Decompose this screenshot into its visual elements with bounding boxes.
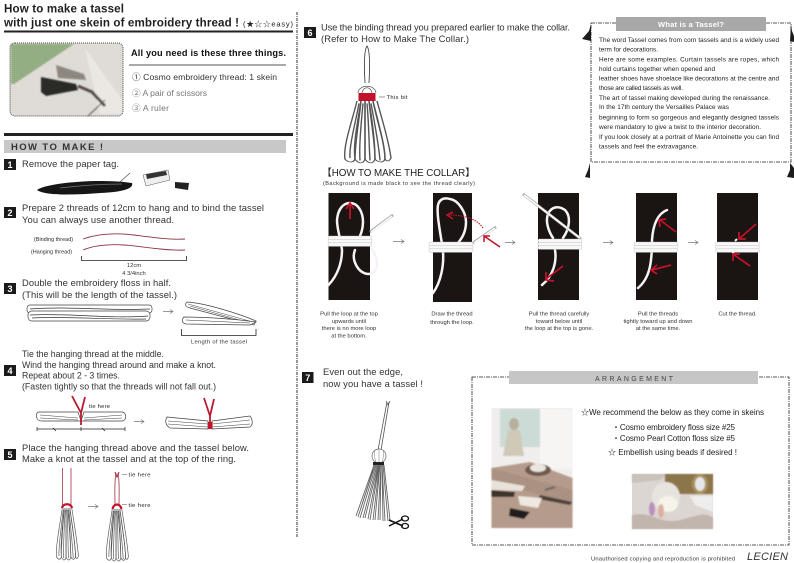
collar step 2: Draw the thread (431, 312, 473, 318)
collar step 3: toward below until (536, 319, 582, 325)
collar step 1: upwards until (332, 319, 366, 325)
diagram: 12cm threads: (Hanging thread) (31, 250, 72, 256)
materials list: All you need is these three things. (131, 48, 286, 58)
diagram: folded floss (27, 302, 256, 346)
collar step 3: the loop at the top is gone. (525, 326, 594, 332)
diagram: tassel with red collar (345, 46, 408, 163)
panel: what is a tassel: What is a Tassel? (658, 20, 724, 29)
step 5: 5 (7, 450, 13, 460)
collar step 2: through the loop. (430, 320, 474, 326)
title: How to make a tassel (4, 2, 124, 16)
diagram: 12cm threads: (Binding thread) (34, 237, 73, 243)
diagram: 12cm threads: 12cm (127, 263, 141, 269)
icon: skein with paper tag (37, 170, 189, 195)
text block: tassel description: If you look closely at a portrait of Marie Antoinette you can find (599, 134, 779, 141)
step 6: 6 (307, 28, 313, 38)
step 4: Repeat about 2 - 3 times. (22, 370, 120, 380)
footer: copyright note: Unauthorised copying and reproduction is prohibited (591, 556, 735, 562)
panel: what is a tassel (582, 17, 794, 178)
diagram: tie at the middle: tie here (89, 404, 110, 410)
step 7: now you have a tassel ! (323, 378, 423, 389)
collar step 4 (624, 193, 692, 332)
step 2: Prepare 2 threads of 12cm to hang and to bind the tassel (22, 202, 264, 213)
text block: tassel description: The word Tassel comes from corn tassels and is a widely used (599, 37, 779, 44)
step 7: Even out the edge, (323, 366, 403, 377)
materials list (129, 48, 286, 113)
materials list: ② A pair of scissors (132, 88, 207, 98)
diagram: tassel with red collar: This bit (386, 95, 408, 101)
text block: recommendations: ・Cosmo embroidery floss size #25 (612, 423, 736, 432)
collar step 5 (716, 193, 760, 318)
step 6: Use the binding thread you prepared earlier to make the collar. (321, 22, 570, 32)
step 2: 2 (7, 208, 13, 218)
text block: tassel description: were mandatory to give a twist to the interior decoration. (598, 124, 761, 131)
materials list: ① Cosmo embroidery thread: 1 skein (132, 72, 277, 82)
step 3: (This will be the length of the tassel.) (22, 289, 177, 300)
text block: tassel description: leather shoes have shoelace like decorations at the centre and (599, 76, 779, 82)
diagram: tie at the middle (36, 396, 252, 431)
text block: tassel description: hold curtains together when opened and (599, 66, 715, 73)
title: with just one skein of embroidery thread ! (3, 16, 239, 30)
text block: recommendations: ・Cosmo Pearl Cotton floss size #5 (612, 434, 736, 443)
heading: how to make: HOW TO MAKE ! (11, 142, 103, 153)
step 6 (304, 22, 570, 163)
diagram: first tassel (56, 468, 78, 560)
collar step 4: at the same time. (636, 326, 681, 332)
text block: tassel description: Here are some examples. Curtain tassels are ropes, which (599, 56, 779, 64)
step 5 (4, 442, 249, 561)
step 5: Make a knot at the tassel and at the top of the ring. (22, 453, 236, 464)
panel: arrangement: ARRANGEMENT (595, 376, 674, 383)
collar step 3 (523, 193, 594, 332)
collar step 5: Cut the thread. (718, 312, 757, 318)
logo: LECIEN: LECIEN (747, 551, 788, 563)
title (3, 2, 294, 30)
text block: recommendations: ☆ Embellish using beads if desired ! (608, 448, 737, 457)
collar step 3: Pull the thread carefully (529, 312, 589, 318)
diagram: second tassel with tie points (106, 472, 150, 561)
collar step 1: Pull the loop at the top (320, 312, 378, 318)
step 4: 4 (7, 366, 13, 376)
step 1: Remove the paper tag. (22, 158, 119, 169)
text block: tassel description: those are called tassels as well. (599, 85, 683, 92)
collar step 4: tightly toward up and down (624, 319, 692, 325)
step 7: 7 (305, 373, 310, 383)
text block: tassel description: tassels and feel the extravagance. (599, 144, 698, 150)
step 1 (4, 158, 189, 195)
text block: recommendations (581, 408, 764, 457)
collar step 1: there is no more loop (322, 326, 376, 332)
text block: tassel description: beginning to form so gorgeous and elegantly designed tassels (599, 114, 779, 122)
diagram: folded floss: Length of the tassel (191, 340, 247, 346)
step 5: Place the hanging thread above and the tassel below. (22, 442, 249, 453)
step 4: Tie the hanging thread at the middle. (22, 349, 164, 359)
heading: how to make the collar: 【HOW TO MAKE THE COLLAR】 (322, 167, 475, 179)
collar step 4: Pull the threads (638, 312, 678, 318)
heading: how to make the collar (322, 167, 475, 187)
photo: bead tassels in glass (632, 474, 713, 529)
step 4: (Fasten tightly so that the threads will not fall out.) (22, 382, 216, 392)
text block: tassel description: In the 17th century the Versailles Palace was (599, 104, 729, 111)
icon: scissors (389, 516, 408, 528)
photo: curtain tassel and scissors (492, 408, 572, 528)
step 4 (4, 349, 252, 431)
text block: tassel description (598, 37, 779, 150)
diagram: finished tassel with scissors (356, 401, 408, 528)
step 6: (Refer to How to Make The Collar.) (321, 33, 469, 44)
diagram: 12cm threads (31, 234, 186, 277)
step 1: 1 (7, 160, 13, 170)
step 4: Wind the hanging thread around and make a knot. (22, 360, 216, 370)
diagram: 12cm threads: 4 3/4inch (122, 271, 146, 277)
heading: how to make the collar: (Background is made black to see the thread clearly) (323, 181, 475, 187)
heading: how to make (4, 140, 286, 153)
text block: tassel description: term for decorations. (599, 46, 658, 54)
step 2: You can always use another thread. (22, 214, 174, 225)
step 7 (302, 366, 423, 528)
step 3 (4, 277, 256, 346)
step 3: 3 (7, 284, 13, 294)
materials list: ③ A ruler (132, 103, 169, 113)
diagram: second tassel with tie points: tie here (128, 503, 150, 509)
title: (★☆☆easy) (243, 20, 294, 28)
panel: arrangement (472, 371, 789, 545)
photo: tassels on fabric (10, 43, 123, 116)
step 3: Double the embroidery floss in half. (22, 277, 171, 288)
text block: tassel description: The art of tassel making developed during the renaissance. (599, 95, 770, 102)
collar step 2 (429, 193, 500, 326)
diagram: second tassel with tie points: tie here (128, 472, 150, 478)
icon: corner tassels (582, 24, 794, 178)
collar step 1: at the bottom. (331, 334, 367, 340)
text block: recommendations: ☆We recommend the below as they come in skeins (581, 408, 764, 417)
step 2 (4, 202, 264, 277)
collar step 1 (320, 193, 393, 340)
